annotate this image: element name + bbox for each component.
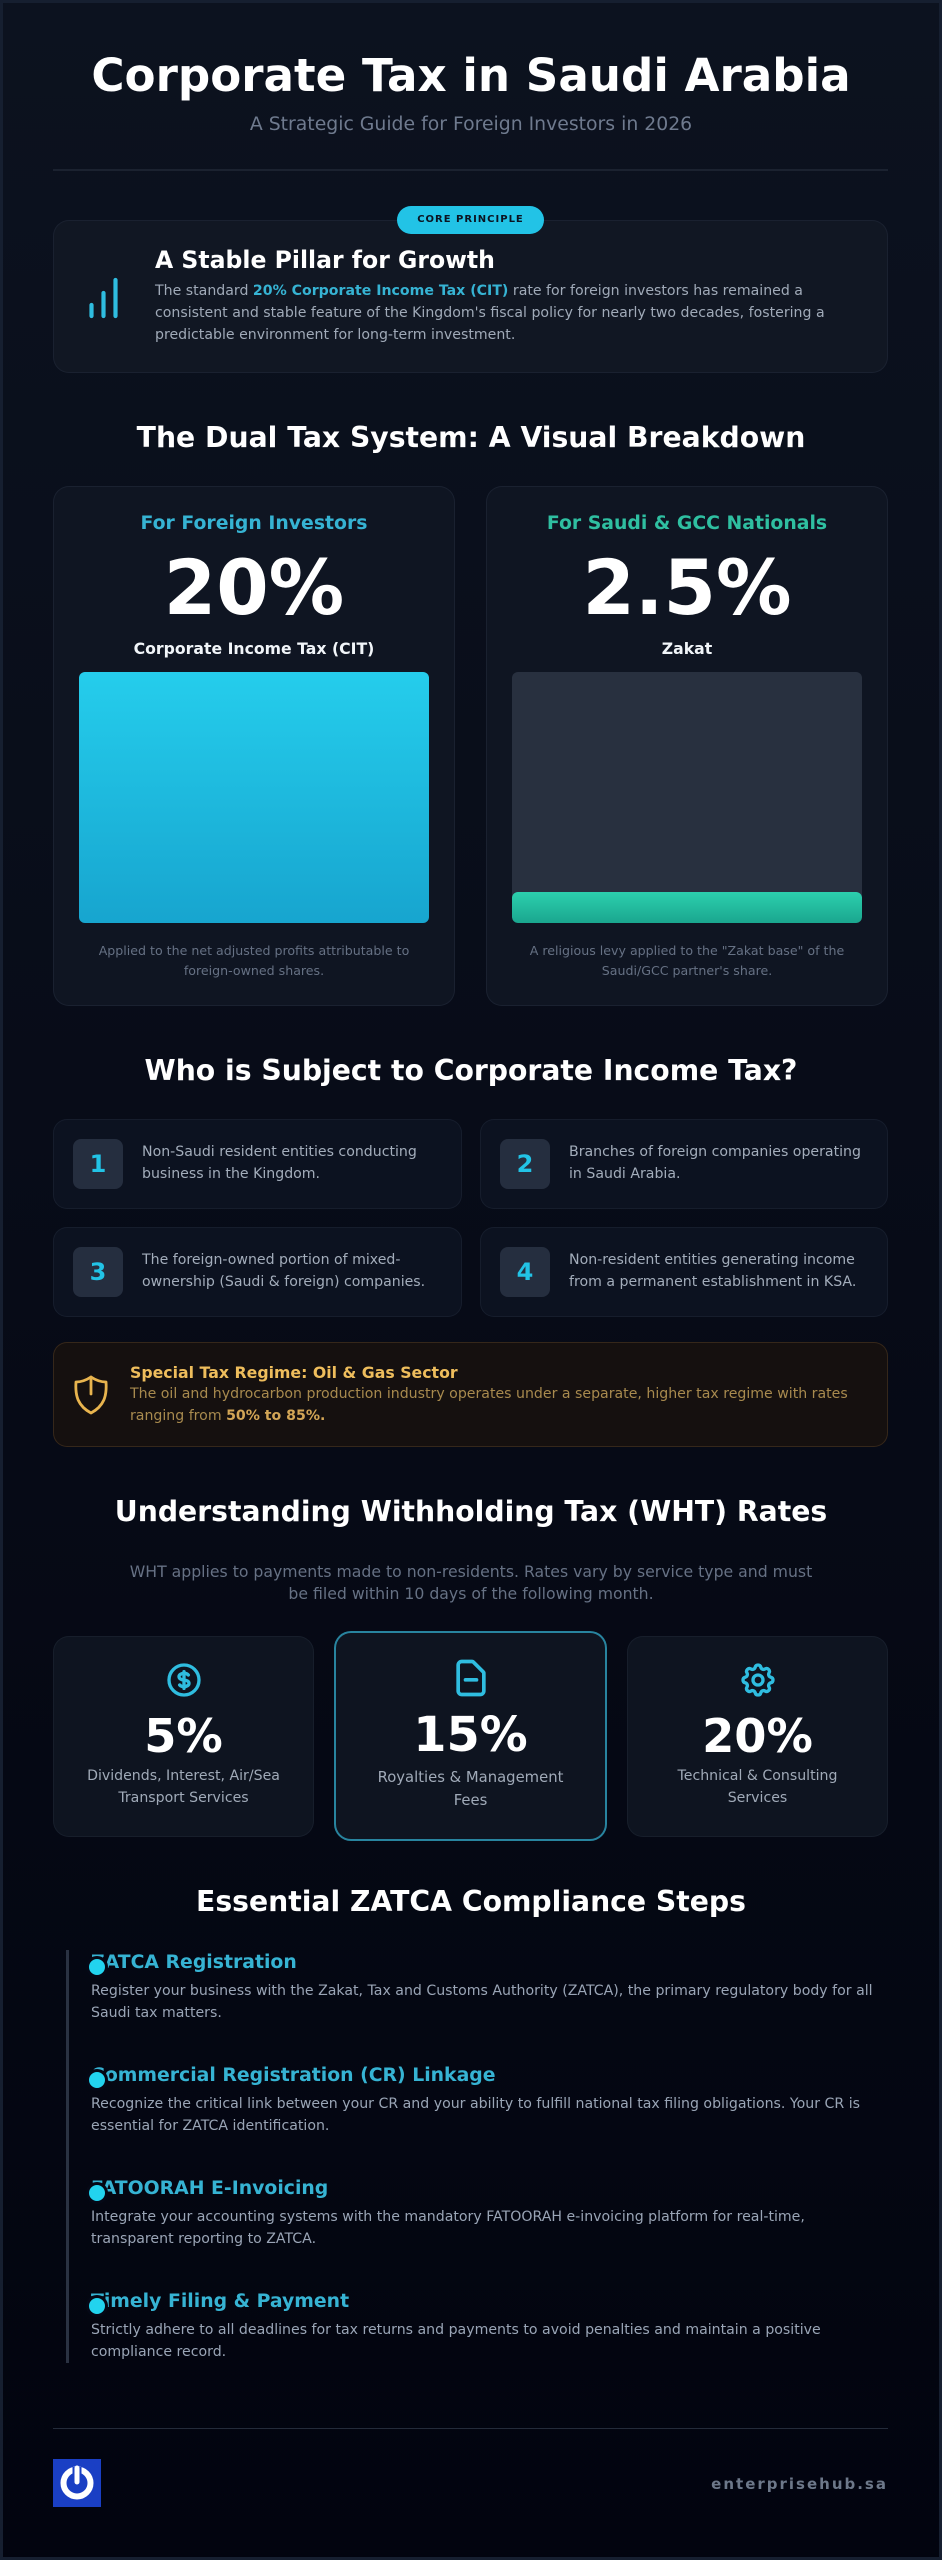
number 3: 3	[90, 1258, 106, 1286]
icon: bar chart	[89, 278, 118, 318]
intro text: WHT applies to payments made to non-residents. Rates vary by service type and must	[130, 1562, 812, 1581]
criterion text: in Saudi Arabia.	[569, 1166, 680, 1182]
step text	[91, 2209, 805, 2247]
card: criterion 1	[53, 1119, 462, 1209]
rate: 15%	[413, 1708, 528, 1763]
rate: 2.5%	[582, 544, 792, 632]
description	[87, 1768, 280, 1806]
callout text: The oil and hydrocarbon production industry operates under a separate, higher tax regime with rates	[130, 1386, 848, 1402]
rate: 5%	[144, 1709, 223, 1763]
heading: withholding tax: Understanding Withholding Tax (WHT) Rates	[115, 1495, 827, 1528]
step title: FATOORAH E-Invoicing	[91, 2178, 328, 2199]
step text	[91, 1983, 873, 2021]
description: Applied to the net adjusted profits attributable to	[99, 943, 409, 958]
callout text: ranging from 50% to 85%.	[130, 1408, 325, 1424]
marker 4	[86, 2295, 108, 2317]
badge: core principle: CORE PRINCIPLE	[417, 214, 524, 225]
bar: 2.5 percent	[512, 672, 862, 923]
marker 2	[86, 2069, 108, 2091]
criterion text: The foreign-owned portion of mixed-	[142, 1252, 400, 1268]
criterion text	[569, 1144, 861, 1182]
timeline: compliance steps	[66, 1950, 873, 2363]
step title: Timely Filing & Payment	[91, 2291, 349, 2312]
panel title: For Foreign Investors	[141, 513, 367, 534]
card: 20 percent	[627, 1636, 888, 1837]
callout: oil and gas	[53, 1342, 888, 1447]
step text	[91, 2096, 860, 2134]
criterion text: from a permanent establishment in KSA.	[569, 1274, 856, 1290]
step text: Saudi tax matters.	[91, 2005, 222, 2021]
number 4: 4	[517, 1258, 533, 1286]
rate label: Zakat	[662, 639, 712, 658]
panel heading: A Stable Pillar for Growth	[155, 246, 495, 274]
panel: core principle	[53, 220, 888, 373]
description: foreign-owned shares.	[184, 962, 324, 978]
bar: 20 percent	[79, 672, 429, 923]
panel body text	[154, 283, 825, 343]
step title: Commercial Registration (CR) Linkage	[91, 2065, 496, 2086]
step 4	[91, 2291, 821, 2360]
description: Services	[728, 1790, 787, 1806]
description: Transport Services	[118, 1790, 249, 1806]
description: Fees	[454, 1792, 487, 1809]
step 1	[91, 1952, 873, 2021]
subtitle: A Strategic Guide for Foreign Investors in 2026	[250, 114, 692, 135]
panel title: For Saudi & GCC Nationals	[547, 513, 827, 534]
step text: essential for ZATCA identification.	[91, 2118, 329, 2134]
panel body text: consistent and stable feature of the Kingdom's fiscal policy for nearly two decades, fostering a	[155, 305, 825, 321]
number 1	[73, 1139, 123, 1189]
panel: foreign investors	[53, 486, 455, 1006]
rate: 20%	[702, 1709, 813, 1763]
step text: Integrate your accounting systems with the mandatory FATOORAH e-invoicing platform for real-time,	[91, 2209, 805, 2225]
criterion text: Non-Saudi resident entities conducting	[142, 1144, 417, 1160]
description	[677, 1768, 837, 1806]
step text: compliance record.	[91, 2344, 226, 2360]
criterion text: Non-resident entities generating income	[569, 1252, 855, 1268]
card: 15 percent	[334, 1631, 607, 1841]
description: Dividends, Interest, Air/Sea	[87, 1768, 280, 1784]
panel body text: The standard 20% Corporate Income Tax (CIT) rate for foreign investors has remained a	[155, 283, 803, 299]
step 2	[91, 2065, 860, 2134]
step 3	[91, 2178, 805, 2247]
description: Saudi/GCC partner's share.	[602, 962, 772, 978]
rate label: Corporate Income Tax (CIT)	[134, 639, 374, 658]
step text: Recognize the critical link between your CR and your ability to fulfill national tax filing obligations. Your CR is	[91, 2096, 860, 2112]
icon: dollar	[167, 1663, 201, 1697]
marker 1	[86, 1956, 108, 1978]
step text	[91, 2322, 821, 2360]
callout title: Special Tax Regime: Oil & Gas Sector	[130, 1363, 458, 1382]
card: criterion 4	[480, 1227, 888, 1317]
card: criterion 3	[53, 1227, 462, 1317]
step title: ZATCA Registration	[91, 1952, 297, 1973]
step text: Strictly adhere to all deadlines for tax returns and payments to avoid penalties and maintain a positive	[91, 2322, 821, 2338]
marker 3	[86, 2182, 108, 2204]
card: criterion 2	[480, 1119, 888, 1209]
rate: 20%	[164, 544, 344, 632]
number 1: 1	[90, 1150, 106, 1178]
panel body text: predictable environment for long-term investment.	[155, 327, 515, 343]
description: Technical & Consulting	[678, 1768, 837, 1784]
number 3	[73, 1247, 123, 1297]
footer website: enterprisehub.sa	[711, 2475, 888, 2493]
intro text: be filed within 10 days of the following month.	[288, 1584, 654, 1602]
criterion text	[142, 1144, 417, 1182]
intro text	[130, 1562, 812, 1602]
criterion text: ownership (Saudi & foreign) companies.	[142, 1274, 425, 1290]
panel: saudi and gcc nationals	[486, 486, 888, 1006]
title: Corporate Tax in Saudi Arabia	[91, 49, 851, 102]
description: Royalties & Management	[378, 1769, 563, 1786]
heading: who is subject: Who is Subject to Corporate Income Tax?	[145, 1054, 797, 1087]
criterion text: business in the Kingdom.	[142, 1166, 320, 1182]
description: A religious levy applied to the "Zakat base" of the	[530, 943, 844, 958]
step text: Register your business with the Zakat, Tax and Customs Authority (ZATCA), the primary regulatory body for all	[91, 1983, 873, 1999]
number 2: 2	[517, 1150, 533, 1178]
card: 5 percent	[53, 1636, 314, 1837]
criterion text	[142, 1252, 425, 1290]
description	[378, 1769, 564, 1809]
heading: dual tax system: The Dual Tax System: A Visual Breakdown	[137, 421, 805, 454]
callout text	[130, 1386, 848, 1424]
number 2	[500, 1139, 550, 1189]
logo	[53, 2459, 101, 2507]
icon: gear	[741, 1663, 775, 1697]
badge: core principle	[397, 206, 544, 234]
icon: document	[456, 1660, 486, 1696]
icon: shield	[74, 1376, 108, 1414]
description	[98, 943, 409, 978]
criterion text: Branches of foreign companies operating	[569, 1144, 861, 1160]
criterion text	[569, 1252, 856, 1290]
step text: transparent reporting to ZATCA.	[91, 2231, 316, 2247]
description	[530, 943, 844, 978]
number 4	[500, 1247, 550, 1297]
heading: zatca steps: Essential ZATCA Compliance Steps	[196, 1885, 746, 1918]
